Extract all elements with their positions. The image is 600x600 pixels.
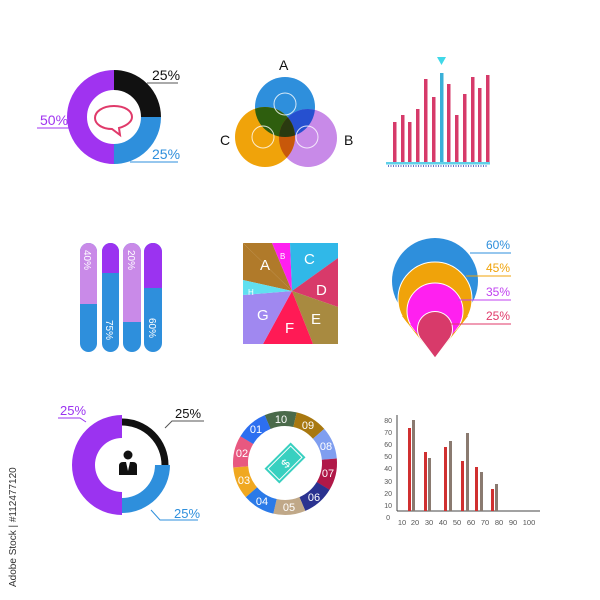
panel: person donut: 25%: [174, 506, 200, 521]
panel: venn diagram: [220, 57, 353, 167]
panel: square pie: A: [260, 257, 270, 274]
panel: grouped bar chart: 70: [481, 518, 489, 527]
panel: pill bars: 75%: [103, 320, 114, 340]
panel: square pie: B: [280, 252, 285, 261]
panel: pill bars: 20%: [125, 250, 136, 270]
panel: numbered ring with money: 08: [320, 441, 332, 453]
icon: businessman: [124, 450, 132, 460]
label: 25% black: 25%: [152, 67, 180, 83]
panel: grouped bar chart: 30: [384, 479, 392, 486]
panel: square pie: [243, 243, 338, 344]
panel: grouped bar chart: 0: [386, 515, 390, 522]
icon: banknote: $: [278, 456, 293, 471]
panel: numbered ring with money: 03: [238, 475, 250, 487]
label: C: C: [220, 132, 230, 148]
panel: grouped bar chart: 50: [384, 454, 392, 461]
panel: numbered ring with money: 01: [250, 424, 262, 436]
label: 25% blue: 25%: [152, 146, 180, 162]
panel: grouped bar chart: 20: [384, 491, 392, 498]
panel: grouped bar chart: 10: [398, 518, 406, 527]
panel: square pie: H: [248, 288, 254, 297]
panel: square pie: D: [316, 282, 327, 299]
panel: person donut: 25%: [175, 406, 201, 421]
panel: grouped bar chart: 30: [425, 518, 433, 527]
panel: numbered ring with money: 09: [302, 420, 314, 432]
panel: grouped bar chart: 60: [384, 442, 392, 449]
panel: square pie: C: [304, 251, 315, 268]
panel: square pie: E: [311, 311, 321, 328]
panel: numbered ring with money: 04: [256, 496, 268, 508]
panel: nested pin chart: 60%: [486, 238, 510, 252]
panel: square pie: F: [285, 320, 294, 337]
panel: grouped bar chart: 70: [384, 430, 392, 437]
panel: donut chart with speech bubble: [37, 67, 180, 162]
panel: nested pin chart: 25%: [486, 309, 510, 323]
panel: grouped bar chart: 80: [384, 418, 392, 425]
panel: numbered ring with money: 06: [308, 492, 320, 504]
panel: grouped bar chart: [384, 415, 540, 527]
panel: person donut: 25%: [60, 403, 86, 418]
panel: grouped bar chart: 90: [509, 518, 517, 527]
panel: grouped bar chart: 10: [384, 503, 392, 510]
panel: grouped bar chart: 40: [384, 466, 392, 473]
panel: numbered ring with money: 05: [283, 502, 295, 514]
panel: person donut: [58, 403, 204, 521]
panel: grouped bar chart: 20: [411, 518, 419, 527]
panel: pill bars: [80, 243, 162, 352]
panel: nested pin chart: 35%: [486, 285, 510, 299]
watermark: stock id: Adobe Stock | #112477120: [8, 467, 19, 587]
panel: grouped bar chart: 100: [523, 518, 535, 527]
panel: grouped bar chart: 50: [453, 518, 461, 527]
panel: numbered ring with money: 02: [236, 448, 248, 460]
panel: grouped bar chart: 40: [439, 518, 447, 527]
panel: numbered ring with money: 10: [275, 414, 287, 426]
icon: triangle marker: [437, 57, 446, 65]
panel: numbered ring with money: [222, 400, 348, 526]
panel: numbered ring with money: 07: [322, 468, 334, 480]
label: B: B: [344, 132, 353, 148]
panel: nested pin chart: 45%: [486, 261, 510, 275]
label: A: A: [279, 57, 289, 73]
panel: square pie: G: [257, 307, 269, 324]
panel: grouped bar chart: 80: [495, 518, 503, 527]
panel: pill bars: 40%: [81, 250, 92, 270]
label: 50%: 50%: [40, 112, 68, 128]
icon: speech bubble: [95, 106, 132, 135]
panel: vertical bar chart: [386, 57, 490, 166]
panel: grouped bar chart: 60: [467, 518, 475, 527]
panel: nested pin chart: [392, 238, 511, 358]
panel: pill bars: 60%: [146, 318, 157, 338]
